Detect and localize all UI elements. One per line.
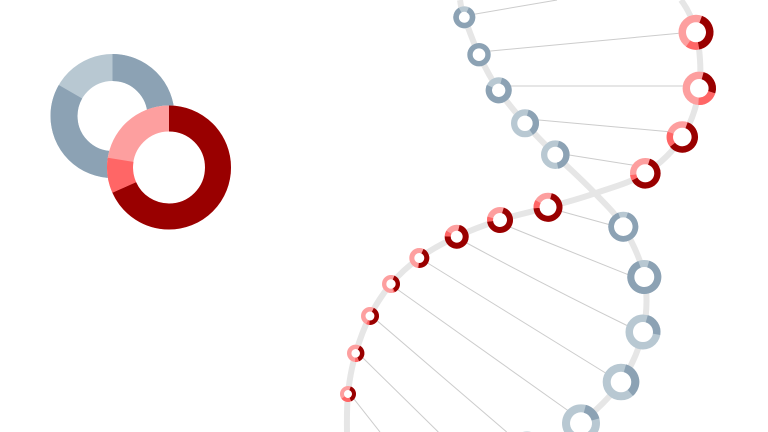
blue node 9 xyxy=(603,364,639,400)
red node 4 xyxy=(629,157,662,190)
red node 2 xyxy=(683,72,716,105)
legend donut: grey-blue xyxy=(64,68,161,164)
red node 12 xyxy=(340,386,356,402)
red node 11 xyxy=(347,344,365,362)
blue node 2 xyxy=(467,43,491,66)
red node 6 xyxy=(487,207,513,233)
helix strand: blue side xyxy=(460,0,646,423)
helix strand: red side xyxy=(347,0,700,432)
blue node 6 xyxy=(608,211,639,242)
red node 8 xyxy=(409,248,429,268)
red node 5 xyxy=(534,193,562,222)
blue node 7 xyxy=(627,260,661,294)
connector lines between strands xyxy=(352,0,688,432)
blue node 11 xyxy=(523,431,531,432)
blue node 5 xyxy=(541,140,570,169)
red node 10 xyxy=(361,307,379,325)
blue node 4 xyxy=(511,109,539,137)
red node 9 xyxy=(382,275,400,293)
blue node 3 xyxy=(486,77,512,103)
red node 1 xyxy=(678,15,714,50)
legend donut: red xyxy=(104,103,234,232)
red node 7 xyxy=(445,225,469,249)
red node 3 xyxy=(665,119,700,155)
blue node 1 xyxy=(453,6,475,28)
blue node 10 xyxy=(562,404,600,432)
blue node 8 xyxy=(626,314,660,350)
